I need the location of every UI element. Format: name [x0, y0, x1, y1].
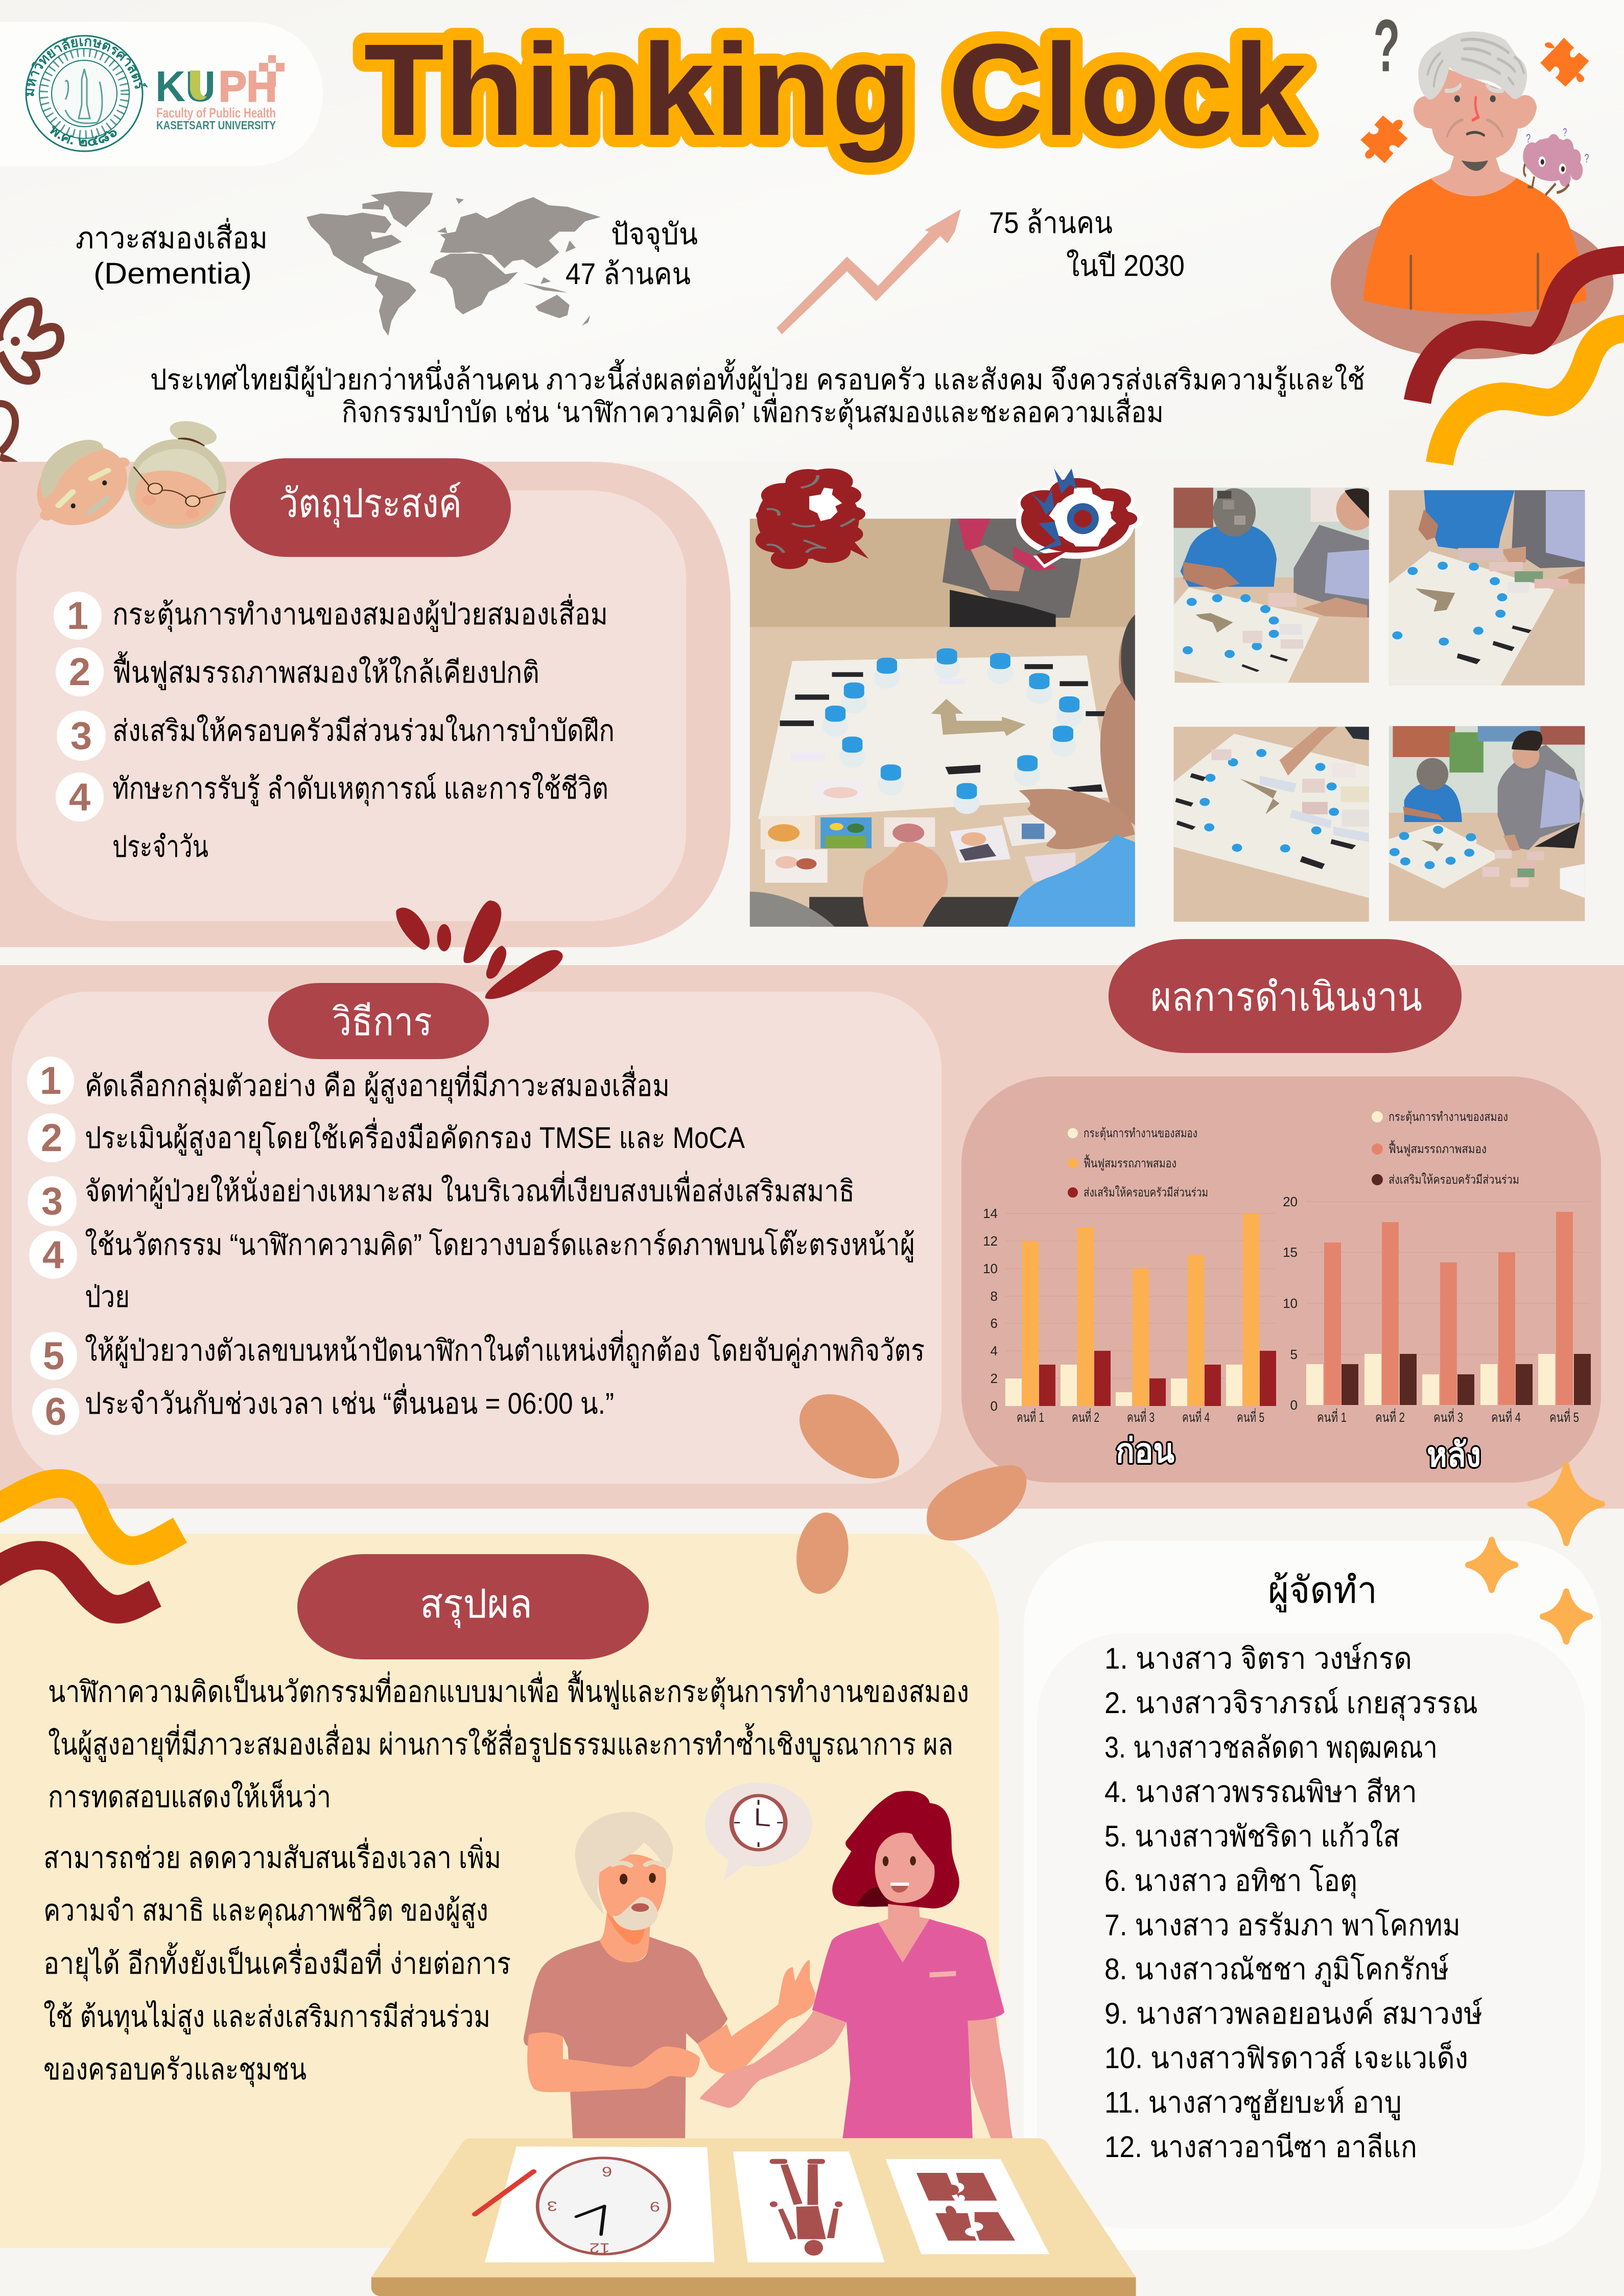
- panel: organizers: [1024, 1541, 1601, 2250]
- objective 1: [54, 592, 608, 640]
- list of organizers: 8. นางสาวณัชชา ภูมิโคกรักษ์: [1104, 1952, 1449, 1987]
- method 4: [29, 1228, 915, 1314]
- objective 1: กระตุ้นการทำงานของสมองผู้ป่วยสมองเสื่อม: [112, 594, 608, 632]
- bars: after: [1306, 1212, 1591, 1405]
- speech bubble with clock: [704, 1783, 812, 1882]
- elderly man face: [19, 434, 145, 537]
- brain character: ?: [1563, 126, 1567, 138]
- method 6: [32, 1383, 614, 1435]
- text: conclusion paragraph: การทดสอบแสดงให้เห็นว่า: [48, 1779, 331, 1814]
- blue shirt: [1003, 834, 1135, 927]
- y axis: before: 12: [983, 1233, 998, 1249]
- chart caption: before: ก่อน: [1116, 1432, 1174, 1469]
- text: conclusion benefits: ความจำ สมาธิ และคุณภาพชีวิต ของผู้สูง: [43, 1894, 488, 1929]
- worksheet: clock: [475, 2146, 715, 2262]
- text: conclusion paragraph: [48, 1671, 969, 1814]
- x axis: after: [1317, 1408, 1579, 1425]
- text: introduction: ประเทศไทยมีผู้ป่วยกว่าหนึ่งล้านคน ภาวะนี้ส่งผลต่อทั้งผู้ป่วย ครอบครัว และสังคม จึงควรส่งเสริมความรู้และใช้: [150, 359, 1365, 397]
- y axis: before: 2: [991, 1371, 998, 1386]
- illustration: caregiver and elder with clock activity: [371, 1783, 1136, 2296]
- method 5: [30, 1330, 925, 1380]
- table: [371, 2138, 1136, 2296]
- header background: [0, 0, 1624, 461]
- text: dementia label: ภาวะสมองเสื่อม: [76, 218, 268, 255]
- text: current patients: [566, 218, 698, 291]
- method 1: คัดเลือกกลุ่มตัวอย่าง คือ ผู้สูงอายุที่มีภาวะสมองเสื่อม: [85, 1065, 670, 1104]
- logo: KUPH: KASETSART UNIVERSITY: [156, 119, 276, 132]
- photo: main board activity: [750, 519, 1135, 927]
- method 5: 5: [43, 1334, 64, 1378]
- legend: after: [1372, 1110, 1519, 1187]
- worksheet: puzzle: [886, 2159, 1049, 2254]
- text: 2030 projection: 75 ล้านคน: [989, 206, 1113, 240]
- bars: before: [1005, 1213, 1276, 1406]
- objective 3: [57, 711, 615, 761]
- heading pill: results: ผลการดำเนินงาน: [1150, 974, 1422, 1019]
- worksheet: human body: [733, 2151, 885, 2262]
- icon: brain with puzzle: [756, 468, 869, 569]
- dark table edge and grey sleeve: [809, 897, 1019, 927]
- logo: Kasetsart University seal: [26, 35, 148, 152]
- y axis: before: 0: [991, 1398, 998, 1414]
- text: current patients: 47 ล้านคน: [566, 257, 691, 291]
- numbered bottles: [934, 648, 960, 680]
- panel: objectives: [0, 458, 731, 947]
- text: 2030 projection: [989, 206, 1185, 283]
- chart caption: after: หลัง: [1427, 1436, 1481, 1473]
- heading pill: conclusion: สรุปผล: [420, 1581, 532, 1628]
- y axis: after: 5: [1290, 1347, 1298, 1362]
- y axis: before: [983, 1206, 998, 1414]
- puzzle pieces: [1360, 38, 1589, 163]
- logo panel: [0, 22, 323, 166]
- y axis: after: 0: [1290, 1397, 1298, 1413]
- objective 2: 2: [69, 650, 90, 694]
- text: conclusion benefits: ของครอบครัวและชุมชน: [43, 2053, 307, 2088]
- photo: board with patient 1: [1173, 488, 1376, 683]
- decorative stars: [1468, 1465, 1602, 1642]
- band: methods and results background: [0, 965, 1624, 1509]
- legend: before: ฟื้นฟูสมรรถภาพสมอง: [1084, 1154, 1176, 1171]
- picture cards: [761, 779, 1075, 883]
- decorative flower: [0, 301, 60, 381]
- heading: organizers: ผู้จัดทำ: [1268, 1570, 1377, 1612]
- method 1: [27, 1057, 670, 1105]
- heading pill: objectives: [230, 458, 511, 557]
- icon: world map: [307, 191, 601, 336]
- elderly man: [524, 1812, 815, 2138]
- text: introduction: [150, 359, 1365, 430]
- list of organizers: [1104, 1642, 1482, 2164]
- list of organizers: 5. นางสาวพัชริดา แก้วใส: [1104, 1819, 1400, 1853]
- objective 3: 3: [70, 714, 92, 758]
- heading pill: objectives: วัตถุประสงค์: [279, 481, 462, 528]
- method 4: ใช้นวัตกรรม “นาฬิกาความคิด” โดยวางบอร์ดและการ์ดภาพบนโต๊ะตรงหน้าผู้: [85, 1228, 915, 1262]
- x axis: after: คนที่ 3: [1433, 1408, 1463, 1425]
- method 4: ป่วย: [85, 1280, 130, 1314]
- bar chart: before: [983, 1127, 1276, 1469]
- method 3: จัดท่าผู้ป่วยให้นั่งอย่างเหมาะสม ในบริเวณที่เงียบสงบเพื่อส่งเสริมสมาธิ: [85, 1170, 855, 1209]
- legend: after: กระตุ้นการทำงานของสมอง: [1388, 1110, 1508, 1124]
- method 6: 6: [45, 1390, 66, 1434]
- list of organizers: 7. นางสาว อรรัมภา พาโคกทม: [1104, 1908, 1461, 1942]
- elderly woman face: [128, 416, 226, 529]
- method 3: 3: [41, 1180, 63, 1223]
- photo: staff guiding patient: [1389, 726, 1586, 921]
- list of organizers: 6. นางสาว อทิชา โอตุ: [1104, 1864, 1357, 1899]
- x axis: after: คนที่ 2: [1375, 1408, 1405, 1425]
- text: 2030 projection: ในปี 2030: [1066, 249, 1185, 283]
- method 5: ให้ผู้ป่วยวางตัวเลขบนหน้าปัดนาฬิกาในตำแหน่งที่ถูกต้อง โดยจับคู่ภาพกิจวัตร: [85, 1330, 925, 1368]
- method 4: 4: [42, 1233, 64, 1277]
- bar chart: after: [1283, 1110, 1591, 1473]
- shirt: [1363, 178, 1587, 314]
- inner list panel: [1037, 1633, 1585, 2229]
- decorative squiggle: yellow left: [0, 1484, 180, 1551]
- clock board: [1173, 588, 1319, 683]
- arrow: rising trend: [776, 209, 961, 334]
- y axis: before: 14: [983, 1206, 998, 1221]
- legend: before: กระตุ้นการทำงานของสมอง: [1084, 1127, 1197, 1141]
- decorative blobs: [791, 1394, 1026, 1597]
- decorative squiggle: red top right: [1418, 260, 1624, 402]
- text: conclusion benefits: อายุได้ อีกทั้งยังเป็นเครื่องมือที่ ง่ายต่อการ: [43, 1942, 511, 1982]
- y axis: after: 15: [1283, 1245, 1298, 1260]
- panel inner: [16, 490, 686, 921]
- y axis: before: 8: [991, 1288, 998, 1304]
- neck and face: [1431, 155, 1517, 196]
- brain character: ?: [1526, 132, 1531, 146]
- decorative squiggle: yellow top right: [1440, 327, 1624, 463]
- y axis: after: 10: [1283, 1296, 1298, 1311]
- worksheet: clock: 3: [547, 2198, 557, 2214]
- brain character: ?: [1585, 152, 1589, 166]
- objective 4: [56, 771, 608, 863]
- objective 4: ทักษะการรับรู้ ลำดับเหตุการณ์ และการใช้ชีวิต: [112, 771, 608, 807]
- text: conclusion benefits: [43, 1837, 511, 2088]
- list of organizers: 2. นางสาวจิราภรณ์ เกยสุวรรณ: [1104, 1686, 1478, 1721]
- text: dementia label: [76, 218, 268, 290]
- x axis: before: คนที่ 4: [1182, 1408, 1210, 1425]
- elder head and hand: [1100, 615, 1135, 825]
- method 2: 2: [41, 1116, 62, 1160]
- heading pill: methods: [268, 983, 489, 1059]
- standing person: [943, 519, 1087, 618]
- text: conclusion benefits: ใช้ ต้นทุนไม่สูง และส่งเสริมการมีส่วนร่วม: [43, 2000, 490, 2035]
- method 6: ประจำวันกับช่วงเวลา เช่น “ตื่นนอน = 06:00 น.”: [85, 1383, 614, 1420]
- x axis: before: คนที่ 3: [1127, 1408, 1155, 1425]
- objective 3: ส่งเสริมให้ครอบครัวมีส่วนร่วมในการบำบัดฝึก: [112, 714, 615, 747]
- decorative curl: [0, 404, 28, 495]
- decorative red splash: [396, 900, 563, 999]
- legend: before: [1068, 1127, 1208, 1200]
- helper hand: [863, 842, 948, 927]
- text: dementia label: (Dementia): [93, 257, 252, 290]
- panel: methods: [12, 983, 942, 1484]
- text: conclusion paragraph: นาฬิกาความคิดเป็นนวัตกรรมที่ออกแบบมาเพื่อ ฟื้นฟูและกระตุ้นการทำงานของสมอง: [48, 1671, 969, 1710]
- y axis: after: [1283, 1194, 1298, 1413]
- decorative squiggle: red left: [0, 1555, 155, 1609]
- standing staff: [1498, 745, 1584, 850]
- board: [1389, 824, 1500, 888]
- list of organizers: 11. นางสาวซูฮัยบะห์ อาบู: [1104, 2086, 1402, 2120]
- y axis: after: 20: [1283, 1194, 1298, 1209]
- method 1: 1: [40, 1059, 61, 1103]
- facial features: [1454, 96, 1460, 102]
- method 2: ประเมินผู้สูงอายุโดยใช้เครื่องมือคัดกรอง TMSE และ MoCA: [85, 1117, 745, 1156]
- worksheet: clock: 6: [650, 2199, 660, 2214]
- female caregiver: [700, 1791, 1013, 2138]
- logo: KUPH: Faculty of Public Health: [156, 105, 276, 121]
- legend: after: ฟื้นฟูสมรรถภาพสมอง: [1388, 1140, 1487, 1157]
- list of organizers: 10. นางสาวฟิรดาวส์ เจะแวเด็ง: [1104, 2041, 1468, 2075]
- icon: brain with gear and lightning: [1016, 468, 1143, 568]
- icon: elderly couple faces: [19, 416, 226, 537]
- x axis: after: คนที่ 5: [1549, 1408, 1579, 1425]
- y axis: before: 10: [983, 1261, 998, 1276]
- staff member: [1293, 525, 1369, 618]
- text: conclusion paragraph: ในผู้สูงอายุที่มีภาวะสมองเสื่อม ผ่านการใช้สื่อรูปธรรมและการทำซ้ำเชิงบูรณาการ ผล: [48, 1723, 953, 1763]
- x axis: after: คนที่ 4: [1491, 1408, 1521, 1425]
- seated patient: [1404, 782, 1462, 822]
- x axis: before: [1017, 1408, 1264, 1425]
- list of organizers: 4. นางสาวพรรณพิษา สีหา: [1104, 1775, 1417, 1809]
- panel: conclusion: [0, 1534, 999, 2248]
- text: introduction: กิจกรรมบำบัด เช่น ‘นาฬิกาความคิด’ เพื่อกระตุ้นสมองและชะลอความเสื่อม: [342, 392, 1164, 430]
- objective 2: ฟื้นฟูสมรรถภาพสมองให้ใกล้เคียงปกติ: [112, 651, 539, 690]
- legend: after: ส่งเสริมให้ครอบครัวมีส่วนร่วม: [1388, 1173, 1519, 1187]
- photo: board with patient 2: [1389, 490, 1585, 686]
- x axis: before: คนที่ 1: [1017, 1408, 1044, 1425]
- list of organizers: 12. นางสาวอานีซา อาลีแก: [1104, 2130, 1417, 2164]
- velcro strips: [780, 664, 1105, 792]
- legend: before: ส่งเสริมให้ครอบครัวมีส่วนร่วม: [1084, 1185, 1208, 1200]
- text: current patients: ปัจจุบัน: [611, 218, 698, 252]
- y axis: before: 4: [991, 1343, 998, 1358]
- icon: confused elderly woman: [1331, 4, 1613, 359]
- x axis: after: คนที่ 1: [1317, 1408, 1347, 1425]
- list of organizers: 1. นางสาว จิตรา วงษ์กรด: [1104, 1642, 1412, 1675]
- x axis: before: คนที่ 2: [1072, 1408, 1099, 1425]
- logo: KUPH: [155, 55, 285, 132]
- title: Thinking Clock: [364, 17, 1307, 163]
- y axis: before: 6: [991, 1316, 998, 1331]
- question mark: ?: [1373, 4, 1400, 87]
- method 3: [28, 1170, 855, 1226]
- logo: Kasetsart University seal: พ.ศ. ๒๔๘๖: [50, 126, 117, 147]
- worksheet: clock: 12: [589, 2240, 610, 2256]
- x axis: before: คนที่ 5: [1237, 1408, 1264, 1425]
- photo: board with cards and time labels: [1173, 727, 1369, 922]
- brain character: [1523, 126, 1589, 195]
- heading pill: methods: วิธีการ: [332, 1000, 432, 1044]
- logo: KUPH: PH: [219, 62, 277, 110]
- list of organizers: 3. นางสาวชลลัดดา พฤฒคณา: [1104, 1731, 1438, 1764]
- objective 2: [56, 647, 539, 696]
- list of organizers: 9. นางสาวพลอยอนงค์ สมาวงษ์: [1104, 1997, 1482, 2030]
- panel: results charts: [961, 1076, 1601, 1483]
- cardboard arrows: [931, 699, 1026, 736]
- hair: [1418, 32, 1527, 100]
- objective 4: ประจำวัน: [112, 830, 208, 863]
- white board: [758, 655, 1111, 819]
- method 2: [28, 1113, 745, 1162]
- logo: Kasetsart University seal: มหาวิทยาลัยเกษตรศาสตร์: [27, 37, 148, 96]
- heading pill: results: [1109, 939, 1462, 1053]
- objective 4: 4: [69, 776, 90, 819]
- objective 1: 1: [67, 594, 88, 638]
- worksheet: clock: 9: [602, 2164, 612, 2180]
- logo: KUPH: KU: [155, 62, 216, 110]
- seated patient: [1181, 523, 1277, 587]
- heading pill: conclusion: [297, 1554, 649, 1659]
- text: conclusion benefits: สามารถช่วย ลดความสับสนเรื่องเวลา เพิ่ม: [43, 1837, 501, 1875]
